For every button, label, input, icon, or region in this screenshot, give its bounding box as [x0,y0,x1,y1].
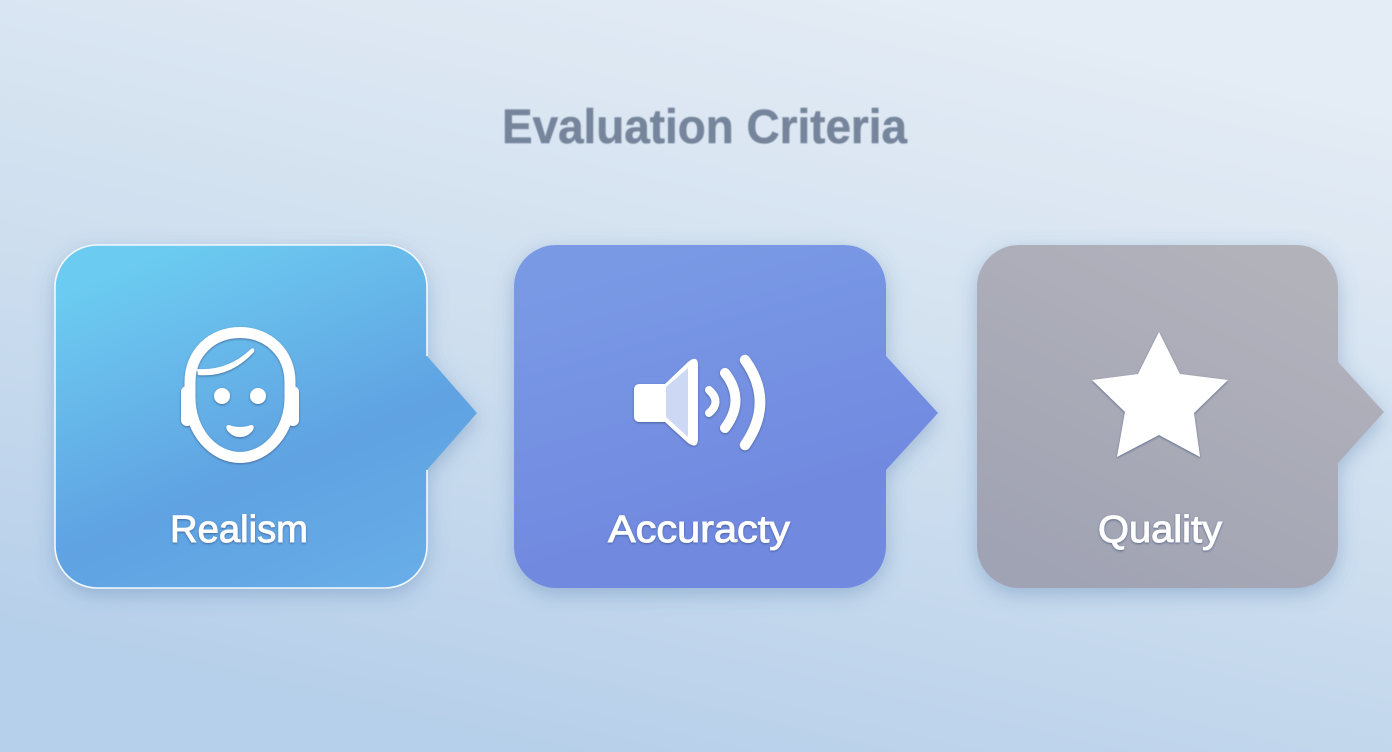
panel: realism [55,245,477,588]
icon: speaker [634,359,760,446]
card shape: realism [55,245,477,588]
icon: star [1092,332,1228,457]
card shape: quality [977,245,1384,588]
label: quality: Quality [1098,509,1222,551]
panel: accuracy [514,245,938,588]
card shape: accuracy [514,245,938,588]
label: accuracy: Accuracty [608,509,790,551]
label: realism: Realism [170,509,308,551]
card outline: realism [55,245,427,588]
icon: face [181,332,299,458]
panel: quality [977,245,1384,588]
title: Evaluation Criteria [502,101,907,154]
